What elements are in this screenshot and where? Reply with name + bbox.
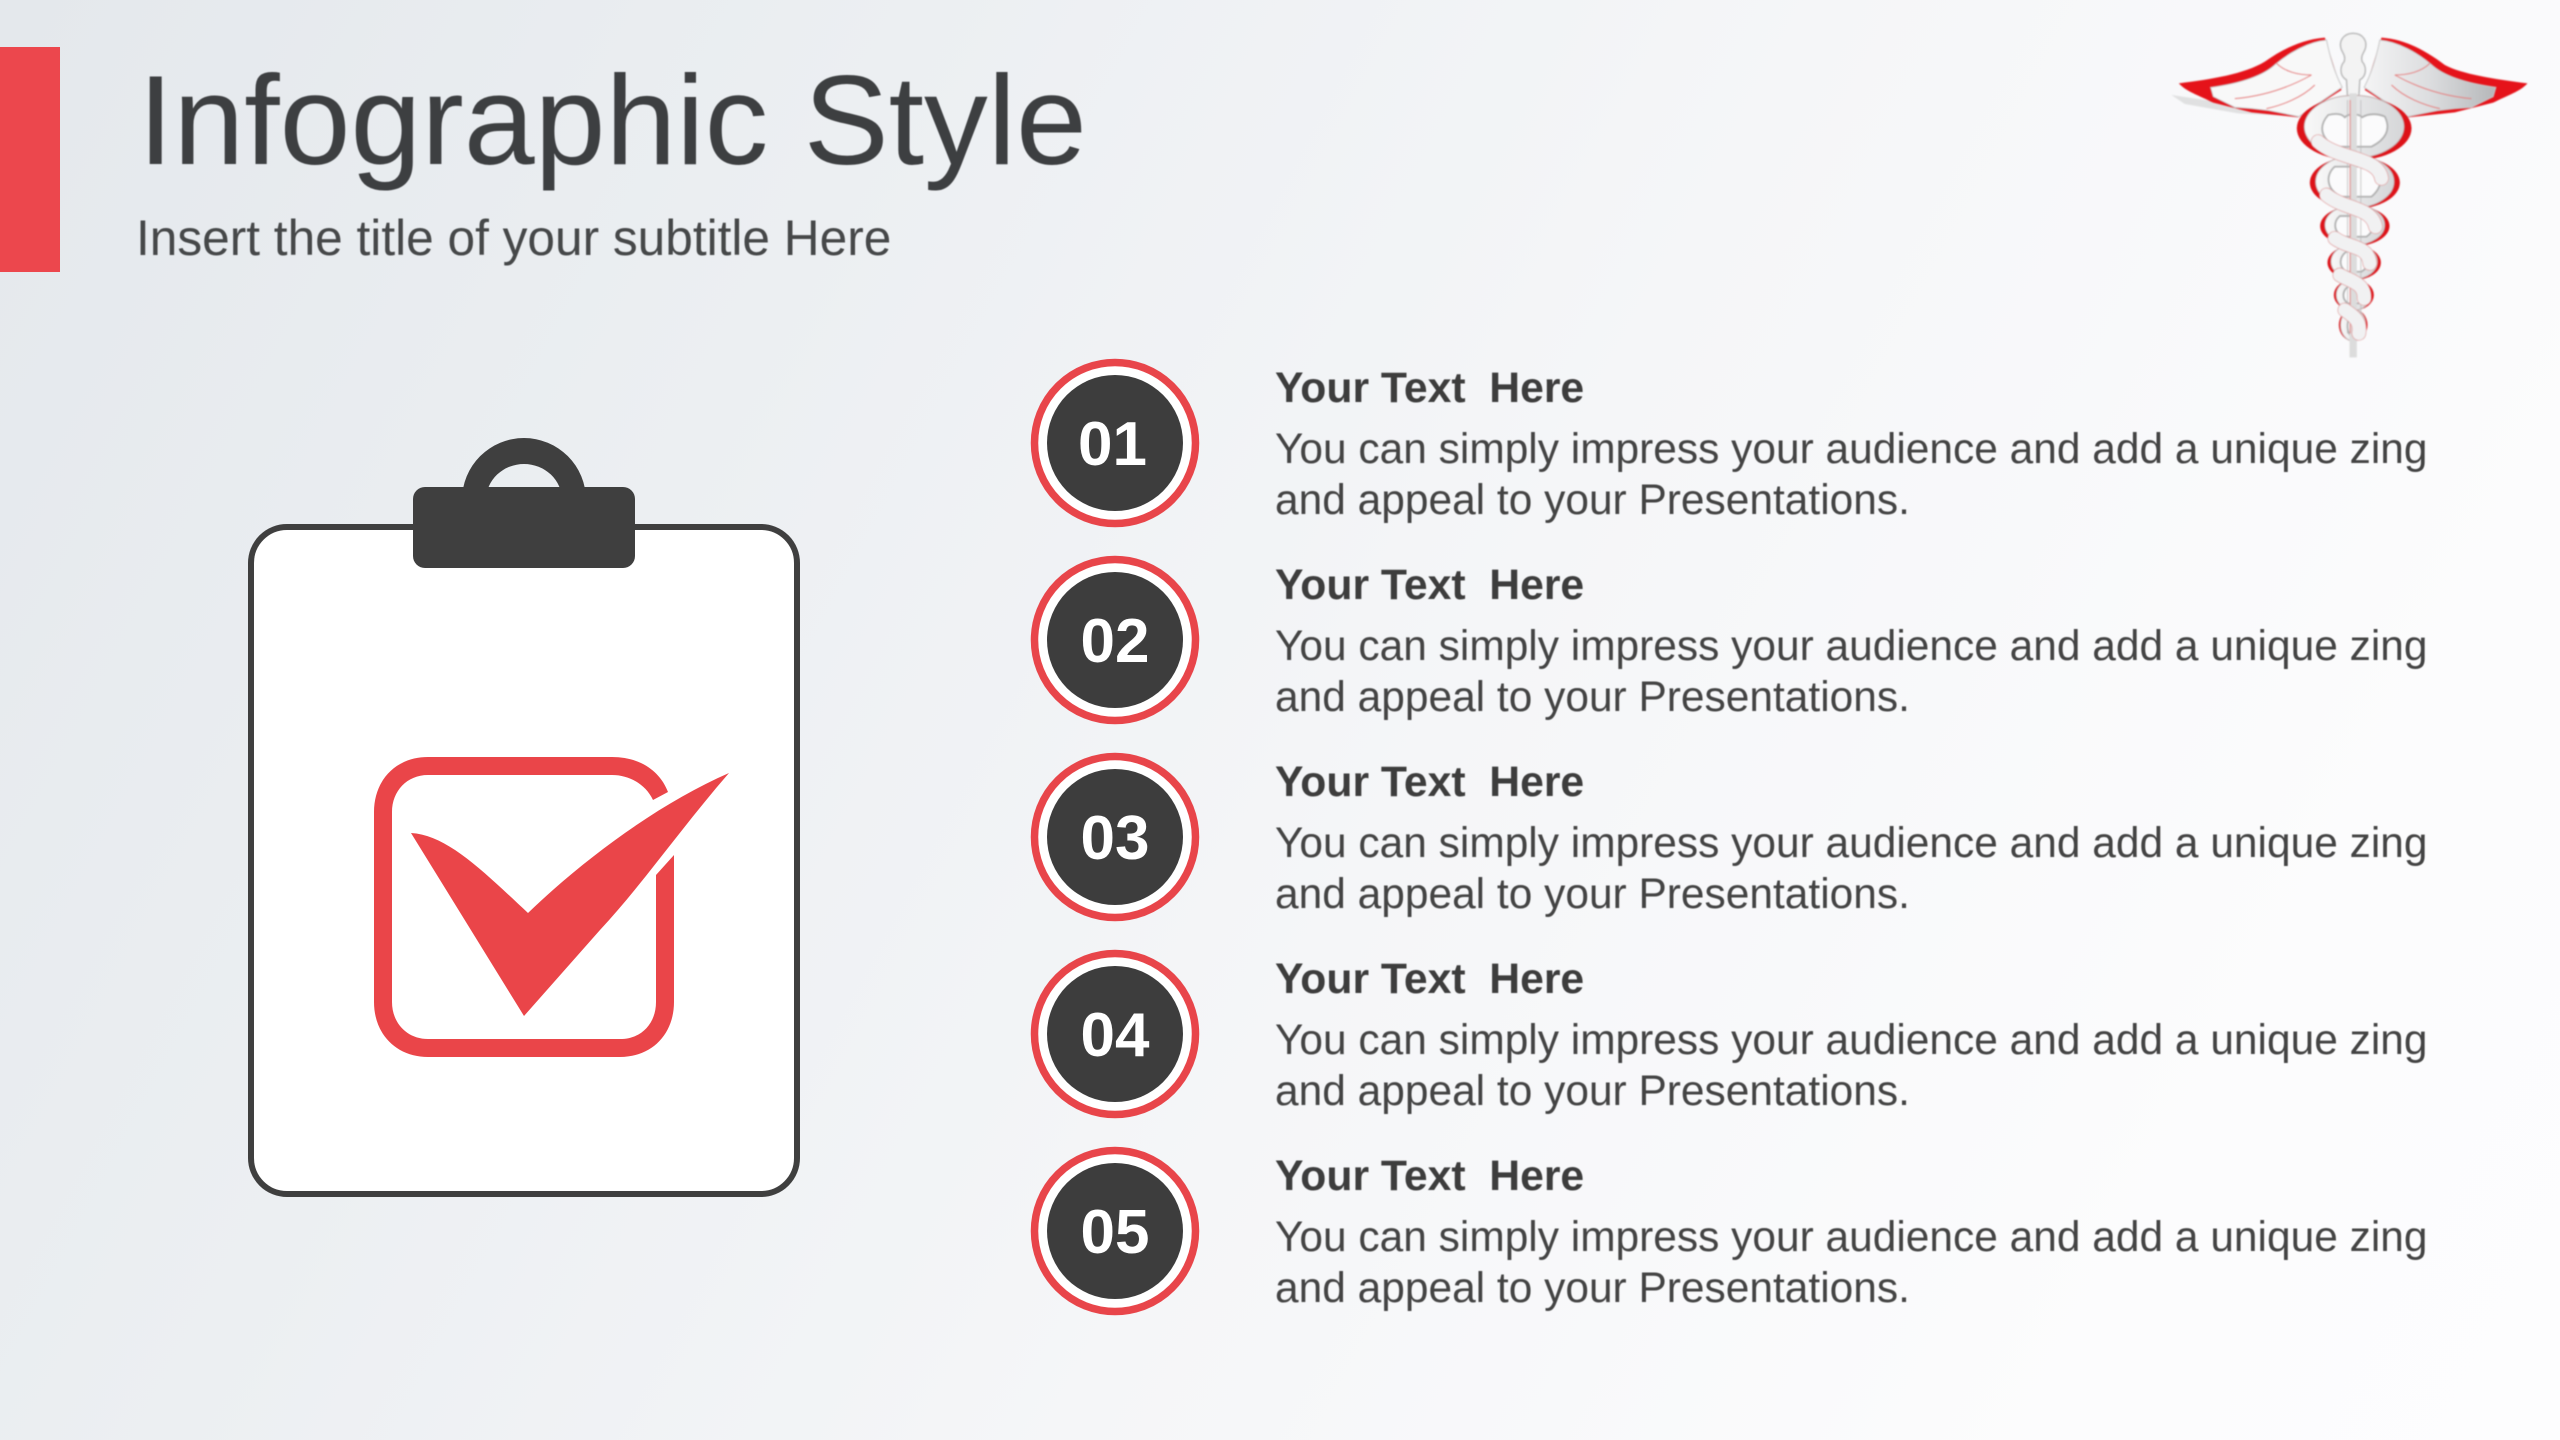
item text 04: and appeal to your Presentations. (1275, 1067, 1910, 1114)
number badge 01 (1030, 358, 1200, 528)
accent bar (0, 47, 60, 272)
item text 03 (1275, 819, 2427, 918)
item text 05: You can simply impress your audience and add a unique zing (1275, 1213, 2427, 1260)
item text 04 (1275, 1016, 2427, 1115)
number badge 01: 01 (1078, 410, 1147, 479)
clipboard board (251, 527, 797, 1194)
serpent windows (2322, 114, 2387, 337)
caduceus head (2340, 33, 2366, 97)
staff (2348, 93, 2361, 357)
item text 01 (1275, 425, 2427, 524)
item text 05 (1275, 1213, 2427, 1312)
number badge 03: 03 (1081, 804, 1149, 873)
item text 02: and appeal to your Presentations. (1275, 673, 1910, 720)
list item 02 (1030, 556, 2427, 724)
item text 03: and appeal to your Presentations. (1275, 870, 1910, 917)
number badge 05 (1030, 1146, 1200, 1316)
item heading 05: Your Text Here (1275, 1152, 1584, 1200)
icon: red check box (374, 757, 729, 1057)
number badge 04: 04 (1081, 1001, 1150, 1070)
item heading 03: Your Text Here (1275, 758, 1584, 806)
number badge 03 (1030, 752, 1200, 922)
serpent lobes, red edges (2297, 96, 2412, 341)
number badge 05: 05 (1081, 1198, 1149, 1267)
item text 05: and appeal to your Presentations. (1275, 1264, 1910, 1311)
icon: clipboard with check mark (248, 438, 800, 1197)
item text 02 (1275, 622, 2427, 721)
icon: caduceus (2173, 32, 2528, 358)
item heading 04: Your Text Here (1275, 955, 1584, 1003)
list item 04 (1030, 950, 2427, 1118)
title: Infographic Style (138, 49, 1087, 191)
right wing (2364, 38, 2528, 117)
list item 01 (1030, 358, 2427, 528)
item heading 01: Your Text Here (1275, 364, 1584, 412)
item text 01: You can simply impress your audience and add a unique zing (1275, 425, 2427, 472)
number badge 02: 02 (1081, 607, 1149, 676)
serpent crossings (2318, 142, 2382, 333)
item heading 02: Your Text Here (1275, 561, 1584, 609)
left wing (2179, 38, 2342, 117)
item text 01: and appeal to your Presentations. (1275, 476, 1910, 523)
subtitle: Insert the title of your subtitle Here (136, 210, 891, 266)
item text 03: You can simply impress your audience and add a unique zing (1275, 819, 2427, 866)
number badge 04 (1030, 950, 1200, 1118)
serpent lobes, silver body (2304, 95, 2404, 341)
clipboard clip (413, 438, 635, 568)
wing shadow (2172, 95, 2298, 117)
item text 02: You can simply impress your audience and add a unique zing (1275, 622, 2427, 669)
list item 05 (1030, 1146, 2427, 1316)
item text 04: You can simply impress your audience and add a unique zing (1275, 1016, 2427, 1063)
number badge 02 (1030, 556, 1200, 724)
list item 03 (1030, 752, 2427, 922)
